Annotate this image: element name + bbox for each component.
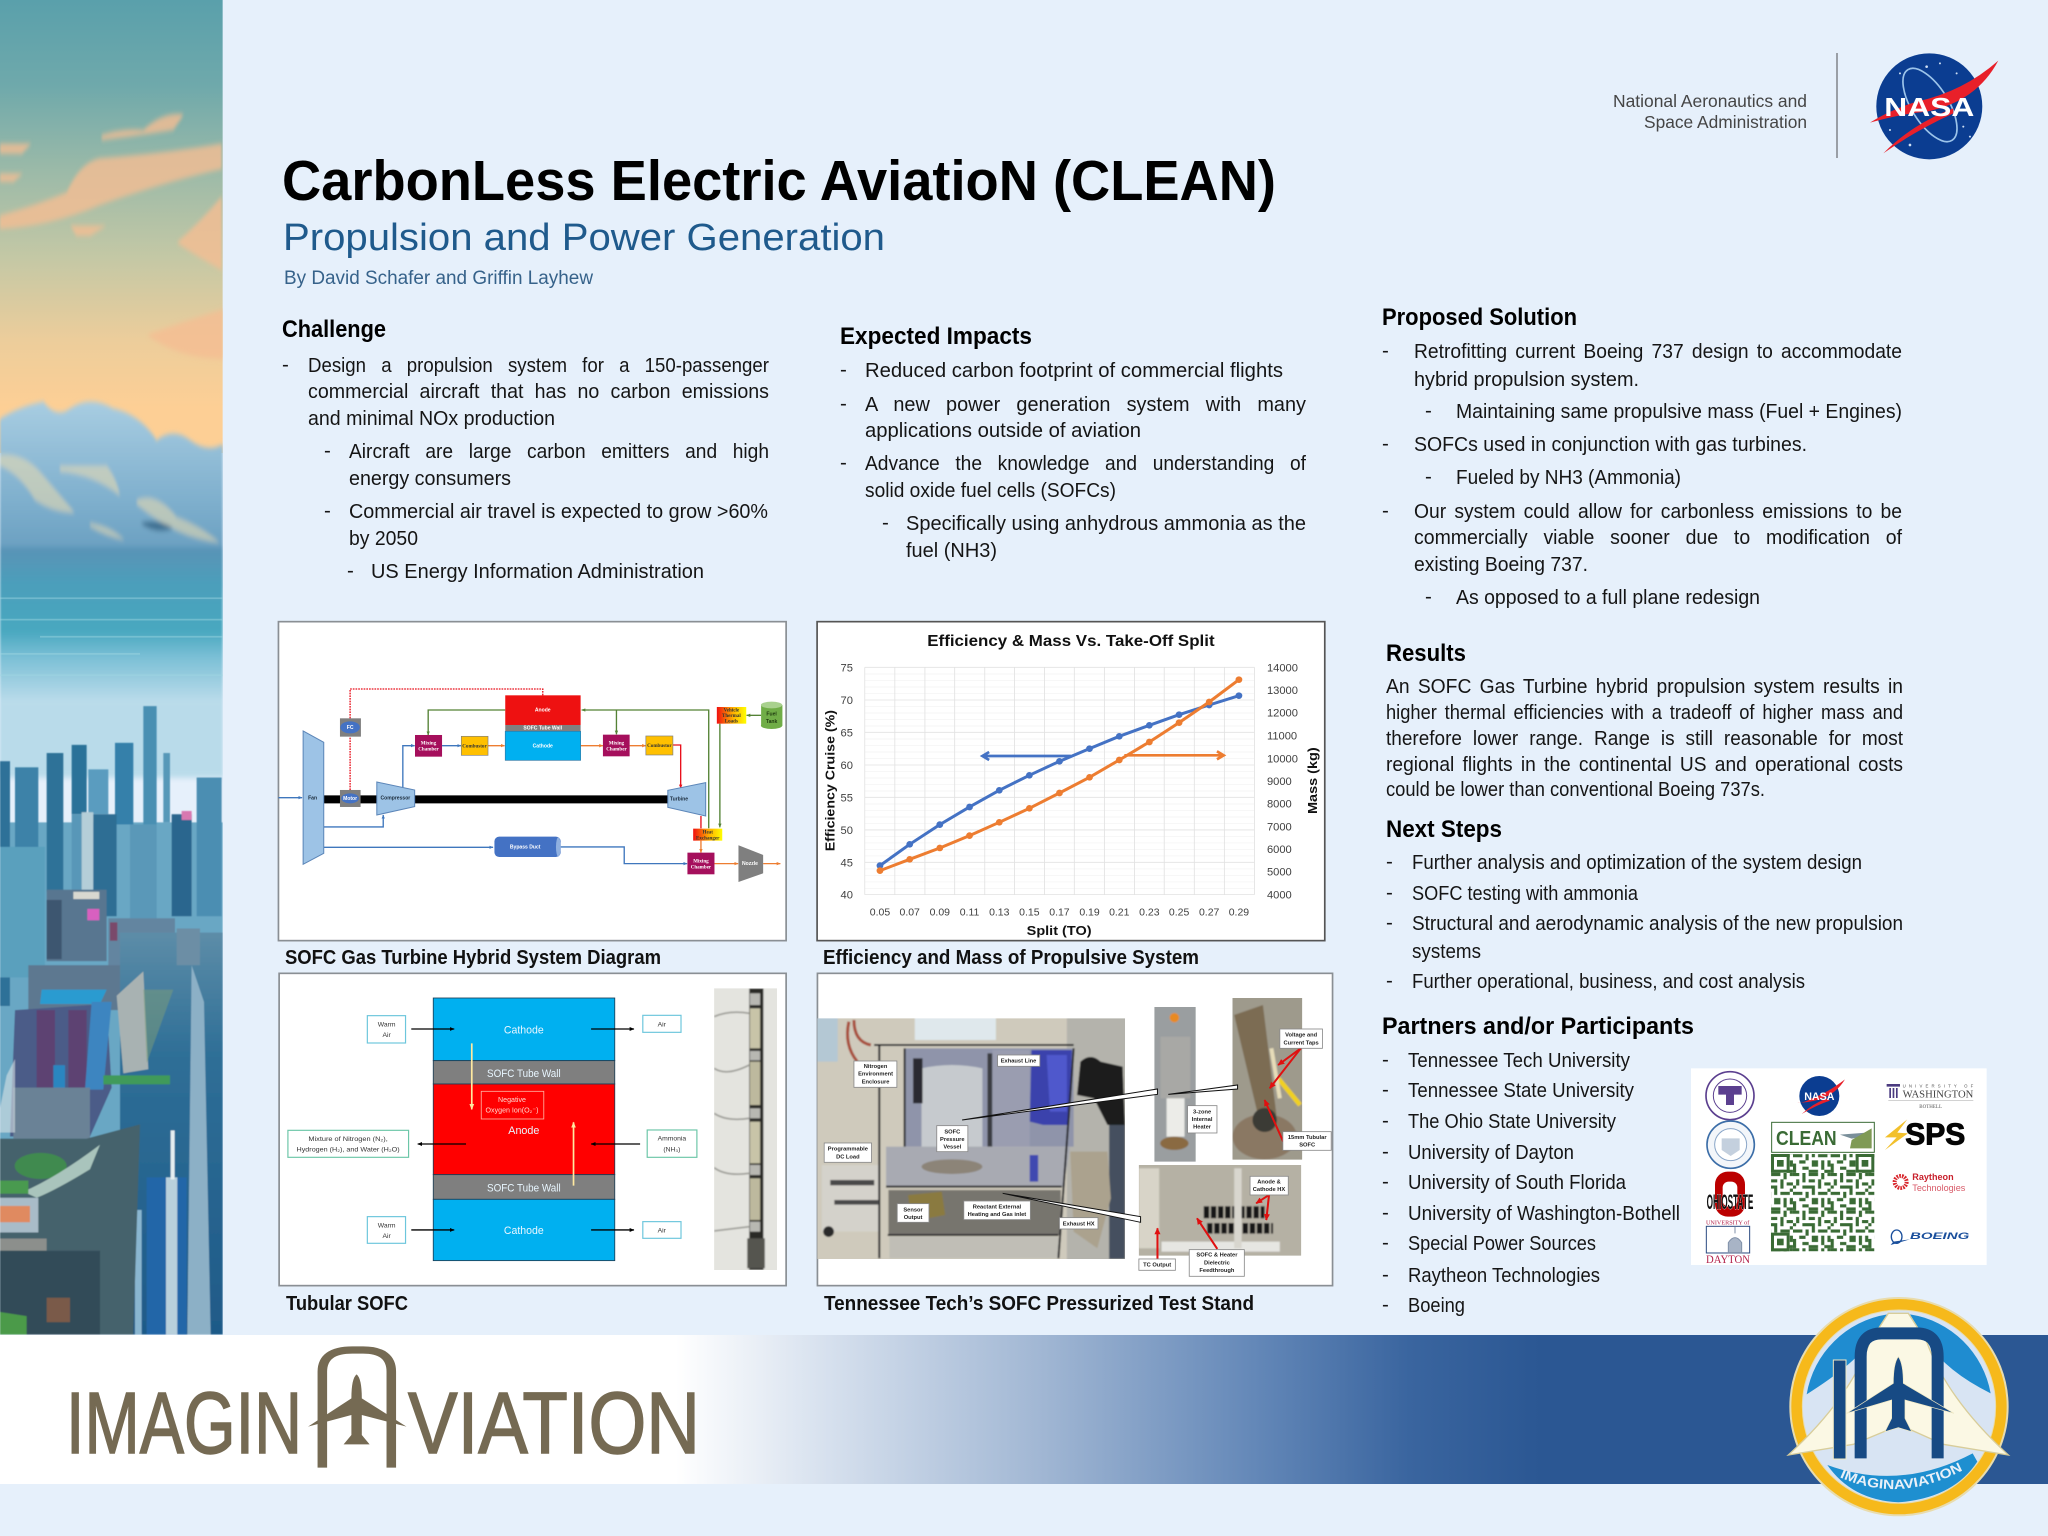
panel: challenge: by 2050 xyxy=(349,527,418,550)
bottom gradient band xyxy=(0,1335,2048,1484)
turbine xyxy=(668,783,706,816)
panel: partners and participants: Tennessee State University xyxy=(1408,1079,1635,1102)
photo labels: 15mm Tubular xyxy=(1288,1135,1327,1141)
axis titles xyxy=(822,710,1320,938)
icon: Raytheon Technologies logo xyxy=(1895,1172,1966,1193)
panel: expected impacts xyxy=(840,323,1307,562)
caption: chart: Efficiency and Mass of Propulsive System xyxy=(823,947,1199,969)
panel: partner logos and QR code xyxy=(1691,1068,1987,1266)
split axis labels: 0.07 xyxy=(900,908,920,919)
photo labels xyxy=(824,1029,1331,1276)
photo labels: Cathode HX xyxy=(1253,1187,1285,1193)
efficiency axis labels: 60 xyxy=(841,760,853,772)
flow labels: Air xyxy=(382,1032,392,1039)
panel: proposed solution: - xyxy=(1382,339,1389,362)
heading: Partners and/or Participants xyxy=(1382,1013,1694,1040)
heading: Challenge xyxy=(282,316,386,343)
heading: Next Steps xyxy=(1386,816,1502,843)
mass axis labels xyxy=(1267,662,1298,902)
icon: Raytheon Technologies logo: Technologies xyxy=(1912,1183,1966,1193)
icon: Tennessee State seal xyxy=(1707,1121,1754,1168)
panel: next steps: SOFC testing with ammonia xyxy=(1412,882,1639,905)
panel: challenge: and minimal NOx production xyxy=(308,407,555,430)
icon: Ohio State logo xyxy=(1707,1172,1753,1217)
nozzle xyxy=(738,845,763,882)
panel: partner logos and QR code: OHIOSTATE xyxy=(1707,1190,1753,1214)
photo labels: Output xyxy=(904,1215,923,1221)
photo labels: Dielectric xyxy=(1204,1260,1230,1266)
ImaginAviation wordmark: IMAGIN xyxy=(66,1375,302,1472)
split axis labels: 0.23 xyxy=(1139,908,1160,919)
panel: pressurized test stand xyxy=(813,973,1333,1286)
flow labels: Warm xyxy=(378,1021,396,1028)
split axis labels: 0.13 xyxy=(989,908,1010,919)
negative oxygen ion label: Oxygen Ion(O₂⁻) xyxy=(486,1108,538,1115)
mixing chamber 2 xyxy=(603,735,630,756)
photo labels: 3-zone xyxy=(1193,1109,1211,1115)
photo labels: Programmable xyxy=(828,1147,868,1153)
panel: proposed solution: hybrid propulsion system. xyxy=(1414,368,1639,391)
panel: results: therefore lower range. Range is still reasonable for most xyxy=(1386,728,1903,750)
icon: NASA meatball: NASA xyxy=(1884,92,1975,122)
panel: challenge: Commercial air travel is expected to grow >60% xyxy=(349,500,768,523)
icon: NASA small logo xyxy=(1797,1076,1845,1116)
panel: partners and participants: - xyxy=(1382,1293,1389,1316)
panel: results: higher thermal efficiencies with a tradeoff of higher mass and xyxy=(1386,702,1903,724)
bypass duct: Bypass Duct xyxy=(510,845,541,851)
heat exchanger: Heat xyxy=(703,831,713,836)
panel: next steps: - xyxy=(1386,850,1393,873)
panel: partners and participants: - xyxy=(1382,1231,1389,1254)
flow labels: Hydrogen (H₂), and Water (H₂O) xyxy=(297,1147,400,1154)
flow labels: Air xyxy=(658,1021,667,1028)
panel: results xyxy=(1386,640,1903,801)
mixing chamber 1 xyxy=(415,735,442,757)
motor xyxy=(340,790,361,807)
photo labels: Heating and Gas inlet xyxy=(968,1212,1026,1218)
panel: expected impacts: - xyxy=(840,358,847,381)
axis titles: Split (TO) xyxy=(1027,923,1092,938)
panel: partners and participants: University of Dayton xyxy=(1408,1141,1574,1164)
photo labels: Internal xyxy=(1192,1117,1213,1123)
panel: proposed solution: - xyxy=(1425,399,1432,422)
mixing chamber 1: Mixing xyxy=(421,742,437,747)
icon: University of Washington Bothell logo: UNIVERSITY OF xyxy=(1903,1083,1974,1088)
ImaginAviation wordmark xyxy=(66,1350,700,1472)
panel: proposed solution: As opposed to a full plane redesign xyxy=(1456,586,1760,609)
panel: challenge: US Energy Information Administration xyxy=(371,560,704,583)
panel: proposed solution: Fueled by NH3 (Ammonia) xyxy=(1456,466,1681,489)
efficiency axis labels xyxy=(841,662,853,902)
caption: test stand: Tennessee Tech’s SOFC Pressurized Test Stand xyxy=(824,1293,1254,1315)
panel: proposed solution: commercially viable sooner due to modification of xyxy=(1414,526,1902,549)
agency name: National Aeronautics and xyxy=(1613,91,1807,111)
heading: Proposed Solution xyxy=(1382,304,1577,331)
panel: tubular SOFC: Anode xyxy=(508,1125,539,1137)
efficiency axis labels: 45 xyxy=(841,857,853,869)
caption: tubular SOFC: Tubular SOFC xyxy=(286,1293,408,1315)
panel: SOFC hybrid system diagram xyxy=(278,622,786,941)
panel: partners and participants: - xyxy=(1382,1048,1389,1071)
split axis labels: 0.11 xyxy=(960,908,980,919)
agency name xyxy=(1613,91,1807,132)
icon: Boeing logo: BOEING xyxy=(1910,1231,1969,1241)
photo labels: Nitrogen xyxy=(864,1064,888,1070)
panel: partners and participants: Special Power Sources xyxy=(1408,1232,1596,1255)
photo labels: Anode & xyxy=(1257,1179,1281,1185)
split axis labels: 0.17 xyxy=(1049,908,1070,919)
panel: expected impacts: fuel (NH3) xyxy=(906,539,997,562)
panel: challenge: Aircraft are large carbon emitters and high xyxy=(349,440,769,463)
split axis labels: 0.09 xyxy=(930,908,950,919)
icon: ImaginAviation emblem: IMAGINAVIATION xyxy=(1840,1462,1962,1490)
panel: partners and participants: University of South Florida xyxy=(1408,1171,1627,1194)
fan: Fan xyxy=(308,796,317,802)
photo: heat exchanger xyxy=(1138,1165,1302,1256)
photo labels: SOFC xyxy=(944,1129,960,1135)
flow labels: Air xyxy=(382,1233,392,1240)
CLEAN logo xyxy=(1772,1122,1874,1152)
mass axis labels: 7000 xyxy=(1267,821,1292,833)
icon: ImaginAviation emblem xyxy=(1786,1297,2010,1516)
flow labels: Mixture of Nitrogen (N₂), xyxy=(308,1136,388,1143)
panel: next steps xyxy=(1386,816,1903,993)
icon: University of Washington Bothell logo: WASHINGTON xyxy=(1903,1089,1974,1100)
flow labels: Warm xyxy=(378,1222,396,1229)
photo labels: Feedthrough xyxy=(1199,1268,1235,1274)
panel: challenge: commercial aircraft that has no carbon emissions xyxy=(308,380,769,403)
photo labels: Reactant External xyxy=(973,1204,1022,1210)
icon: Raytheon Technologies logo: Raytheon xyxy=(1912,1172,1954,1182)
photo labels: DC Load xyxy=(836,1155,860,1161)
photo: test stand xyxy=(813,1015,1128,1263)
arrow: efficiency axis xyxy=(982,752,1071,760)
panel: partners and participants: - xyxy=(1382,1263,1389,1286)
panel: challenge: - xyxy=(347,559,354,582)
panel: proposed solution: Maintaining same propulsive mass (Fuel + Engines) xyxy=(1456,400,1902,423)
heading: Results xyxy=(1386,640,1466,667)
heading: Expected Impacts xyxy=(840,323,1032,350)
CLEAN logo: CLEAN xyxy=(1776,1127,1837,1150)
motor: Motor xyxy=(343,796,357,802)
flow labels: Air xyxy=(658,1227,667,1234)
SOFC stack xyxy=(505,695,581,760)
mass axis labels: 14000 xyxy=(1267,662,1298,674)
panel: partners and participants: - xyxy=(1382,1140,1389,1163)
panel: expected impacts: solid oxide fuel cells (SOFCs) xyxy=(865,479,1116,502)
mass axis labels: 4000 xyxy=(1267,890,1292,902)
combustor 2 xyxy=(646,736,673,755)
icon: University of Washington Bothell logo xyxy=(1887,1083,1974,1110)
SOFC stack: SOFC Tube Wall xyxy=(523,726,563,732)
split axis labels: 0.29 xyxy=(1229,908,1249,919)
icon: NASA small logo: NASA xyxy=(1804,1091,1835,1103)
panel: partners and participants: Tennessee Tech University xyxy=(1408,1049,1631,1072)
mixing chamber 2: Chamber xyxy=(606,747,627,752)
negative oxygen ion label xyxy=(481,1091,544,1119)
panel: challenge: Design a propulsion system for a 150-passenger xyxy=(308,354,769,377)
photo labels: Exhaust HX xyxy=(1063,1221,1095,1227)
panel: next steps: systems xyxy=(1412,940,1481,963)
photo labels: Vessel xyxy=(943,1145,962,1151)
fuel tank: Fuel xyxy=(766,711,777,717)
panel: expected impacts: - xyxy=(840,392,847,415)
photo labels: Environment xyxy=(858,1072,893,1078)
left illustration: futuristic city and sky xyxy=(0,0,223,1334)
panel: partners and participants: - xyxy=(1382,1078,1389,1101)
icon: University of Dayton logo: UNIVERSITY of xyxy=(1706,1220,1749,1227)
combustor 2: Combustor xyxy=(647,744,672,749)
photo labels: SOFC xyxy=(1299,1143,1315,1149)
panel: expected impacts: applications outside of aviation xyxy=(865,419,1141,442)
negative oxygen ion label: Negative xyxy=(498,1097,526,1104)
photo labels: Sensor xyxy=(903,1207,924,1213)
efficiency axis labels: 50 xyxy=(841,825,853,837)
photo: internal heater xyxy=(1154,1007,1196,1162)
subtitle: Propulsion and Power Generation xyxy=(283,217,885,259)
heat exchanger xyxy=(693,829,722,841)
arrow: mass axis xyxy=(1124,751,1224,759)
panel: next steps: - xyxy=(1386,881,1393,904)
icon: University of Dayton logo: DAYTON xyxy=(1706,1252,1750,1266)
panel: next steps: Further operational, business, and cost analysis xyxy=(1412,970,1805,993)
chart title: Efficiency & Mass Vs. Take-Off Split xyxy=(927,632,1215,650)
SOFC layers xyxy=(433,998,615,1261)
split axis labels xyxy=(870,908,1249,919)
panel: challenge: - xyxy=(324,499,331,522)
photo labels: Current Taps xyxy=(1283,1041,1319,1047)
agency name: Space Administration xyxy=(1644,112,1807,132)
panel: tubular SOFC xyxy=(279,973,786,1286)
vehicle thermal loads: Thermal xyxy=(722,714,741,719)
icon: University of Washington Bothell logo: BOTHELL xyxy=(1919,1105,1942,1110)
mass axis labels: 12000 xyxy=(1267,708,1298,720)
mass axis labels: 11000 xyxy=(1267,731,1297,743)
compressor xyxy=(377,782,415,815)
icon: arch and airplane xyxy=(308,1350,406,1468)
panel: efficiency and mass chart xyxy=(817,622,1325,941)
NASA wordmark and logo xyxy=(1613,53,1998,159)
mixing chamber 3 xyxy=(687,853,714,874)
panel: proposed solution: - xyxy=(1382,499,1389,522)
panel: expected impacts: A new power generation system with many xyxy=(865,393,1307,416)
icon: Tennessee Tech seal xyxy=(1706,1072,1754,1120)
panel: proposed solution: - xyxy=(1425,465,1432,488)
series: efficiency xyxy=(877,692,1242,869)
panel: partners and participants: University of Washington-Bothell xyxy=(1408,1202,1680,1225)
photo labels: Heater xyxy=(1193,1125,1212,1131)
mixing chamber 3: Mixing xyxy=(693,859,709,864)
fan xyxy=(303,731,324,864)
mass axis labels: 9000 xyxy=(1267,776,1292,788)
split axis labels: 0.21 xyxy=(1109,908,1130,919)
photo: tubular SOFC xyxy=(714,988,777,1270)
mixing chamber 2: Mixing xyxy=(609,741,625,746)
panel: proposed solution: - xyxy=(1382,432,1389,455)
photo labels: Pressure xyxy=(940,1137,965,1143)
panel: proposed solution: SOFCs used in conjunction with gas turbines. xyxy=(1414,433,1807,456)
photo labels: TC Output xyxy=(1143,1263,1171,1269)
split axis labels: 0.15 xyxy=(1019,908,1040,919)
bypass duct xyxy=(494,837,561,857)
panel: expected impacts: Reduced carbon footprint of commercial flights xyxy=(865,359,1283,382)
SOFC stack: Cathode xyxy=(533,743,553,749)
photo: SOFC tube xyxy=(1232,998,1302,1160)
fuel tank xyxy=(761,702,782,729)
authors: By David Schafer and Griffin Layhew xyxy=(284,268,593,289)
split axis labels: 0.27 xyxy=(1199,908,1220,919)
icon: Special Power Sources logo: SPS xyxy=(1905,1117,1965,1151)
mass axis labels: 8000 xyxy=(1267,799,1292,811)
panel: expected impacts: Advance the knowledge and understanding of xyxy=(865,452,1306,475)
combustor 1 xyxy=(461,736,488,755)
nozzle: Nozzle xyxy=(742,861,758,867)
vehicle thermal loads xyxy=(717,707,746,725)
mixing chamber 1: Chamber xyxy=(418,748,440,753)
mass axis labels: 10000 xyxy=(1267,753,1298,765)
icon: NASA meatball xyxy=(1870,53,1998,159)
efficiency axis labels: 70 xyxy=(841,695,853,707)
panel: challenge: - xyxy=(324,439,331,462)
panel: expected impacts: - xyxy=(882,511,889,534)
photo labels: Exhaust Line xyxy=(1001,1059,1036,1065)
panel: next steps: - xyxy=(1386,969,1393,992)
panel: partners and participants: Boeing xyxy=(1408,1294,1465,1317)
panel: expected impacts: - xyxy=(840,451,847,474)
axis titles: Efficiency Cruise (%) xyxy=(822,710,837,851)
heat exchanger: Exchanger xyxy=(696,836,720,841)
mass axis labels: 13000 xyxy=(1267,685,1298,697)
panel: proposed solution: Retrofitting current Boeing 737 design to accommodate xyxy=(1414,340,1902,363)
panel: partners and participants: - xyxy=(1382,1201,1389,1224)
SOFC stack: Anode xyxy=(535,708,551,714)
photo labels: Voltage and xyxy=(1285,1033,1318,1039)
flow labels: Ammonia xyxy=(658,1136,686,1143)
panel: proposed solution: existing Boeing 737. xyxy=(1414,553,1588,576)
title: CarbonLess Electric AviatioN (CLEAN) xyxy=(282,149,1276,213)
photo labels: SOFC & Heater xyxy=(1196,1253,1238,1259)
flow labels xyxy=(288,1015,697,1243)
panel: partners and participants: - xyxy=(1382,1170,1389,1193)
series: mass xyxy=(877,676,1242,874)
efficiency axis labels: 75 xyxy=(841,662,853,674)
efficiency axis labels: 55 xyxy=(841,792,853,804)
mass axis labels: 6000 xyxy=(1267,844,1292,856)
panel: tubular SOFC: SOFC Tube Wall xyxy=(487,1183,561,1195)
flow labels: (NH₃) xyxy=(663,1147,680,1154)
panel: proposed solution: Our system could allow for carbonless emissions to be xyxy=(1414,500,1902,523)
panel: tubular SOFC: Cathode xyxy=(504,1025,544,1037)
panel: expected impacts: Specifically using anhydrous ammonia as the xyxy=(906,512,1306,535)
vehicle thermal loads: Loads xyxy=(725,720,738,725)
panel: proposed solution: - xyxy=(1425,585,1432,608)
QR code xyxy=(1771,1154,1874,1251)
panel: results: An SOFC Gas Turbine hybrid propulsion system results in xyxy=(1386,676,1903,698)
panel: challenge: energy consumers xyxy=(349,467,511,490)
panel: next steps: Structural and aerodynamic analysis of the new propulsion xyxy=(1412,912,1903,935)
panel: partners and participants: - xyxy=(1382,1109,1389,1132)
icon: University of Dayton logo xyxy=(1706,1220,1750,1266)
fuel cell unit: FC xyxy=(347,725,354,731)
panel: partners and participants: The Ohio State University xyxy=(1408,1110,1617,1133)
panel: next steps: Further analysis and optimization of the system design xyxy=(1412,851,1862,874)
fuel cell unit xyxy=(340,718,361,737)
panel: challenge: - xyxy=(282,353,289,376)
photo labels: Enclosure xyxy=(862,1079,889,1085)
panel: tubular SOFC: SOFC Tube Wall xyxy=(487,1068,561,1080)
panel: next steps: - xyxy=(1386,911,1393,934)
red arrows xyxy=(1157,1048,1301,1259)
split axis labels: 0.19 xyxy=(1079,908,1100,919)
ImaginAviation wordmark: VIATION xyxy=(408,1375,700,1472)
fuel tank: Tank xyxy=(766,719,778,725)
split axis labels: 0.05 xyxy=(870,908,890,919)
axis titles: Mass (kg) xyxy=(1305,747,1320,814)
split axis labels: 0.25 xyxy=(1169,908,1189,919)
caption: system diagram: SOFC Gas Turbine Hybrid System Diagram xyxy=(285,947,661,969)
vehicle thermal loads: Vehicle xyxy=(724,708,740,713)
panel: tubular SOFC: Cathode xyxy=(504,1225,544,1237)
mass axis labels: 5000 xyxy=(1267,867,1292,879)
mixing chamber 3: Chamber xyxy=(691,865,712,870)
combustor 1: Combustor xyxy=(462,744,487,749)
panel: challenge xyxy=(282,316,769,583)
panel: results: regional flights in the continental US and operational costs xyxy=(1386,754,1903,776)
efficiency axis labels: 40 xyxy=(841,890,853,902)
compressor: Compressor xyxy=(381,796,410,802)
panel: results: could be lower than conventional Boeing 737s. xyxy=(1386,779,1765,801)
panel: partners and participants xyxy=(1382,1013,1694,1317)
panel: partners and participants: Raytheon Technologies xyxy=(1408,1264,1600,1287)
efficiency axis labels: 65 xyxy=(841,727,853,739)
panel: proposed solution xyxy=(1382,304,1902,609)
icon: Boeing logo xyxy=(1891,1230,1969,1245)
turbine: Turbine xyxy=(670,797,688,803)
callout wedges xyxy=(962,1085,1238,1222)
